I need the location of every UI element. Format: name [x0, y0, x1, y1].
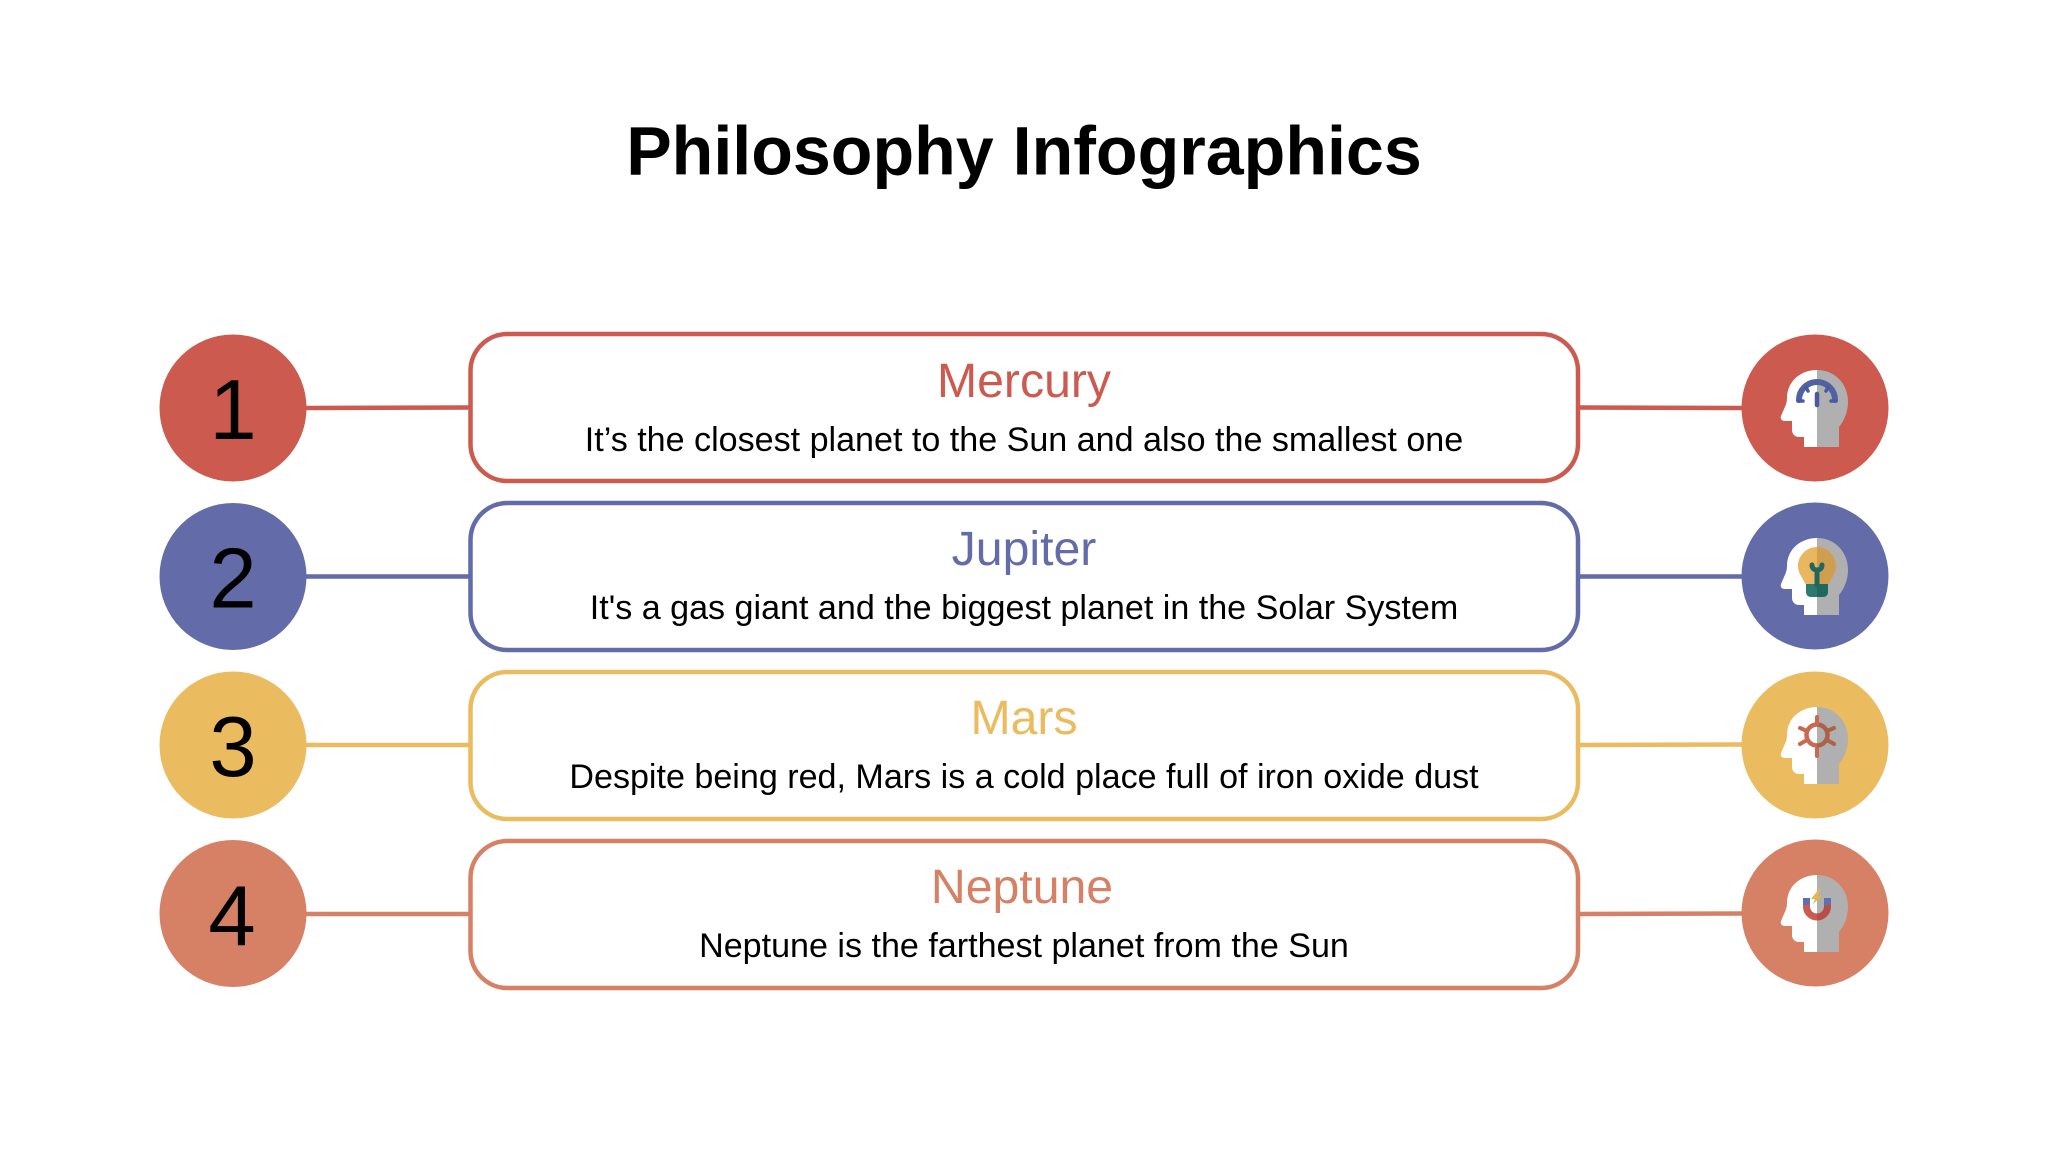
heading: Mercury: Mercury: [937, 354, 1111, 408]
icon: head with gauge: [1742, 334, 1888, 482]
number badge 1: 1: [209, 363, 257, 458]
number badge 3: [160, 672, 306, 818]
row 3: Mars: [160, 672, 1888, 819]
connector: number to box: [305, 743, 470, 747]
panel: Mars: [470, 672, 1578, 819]
connector: box to icon: [1578, 405, 1745, 410]
number badge 4: [160, 840, 306, 987]
heading: Mars: Mars: [970, 691, 1078, 745]
connector: box to icon: [1578, 742, 1745, 747]
number badge 3: 3: [209, 700, 257, 795]
icon: head with light bulb: [1742, 502, 1888, 650]
panel: Mercury: [470, 334, 1578, 481]
number badge 2: [160, 503, 306, 650]
connector: box to icon: [1578, 911, 1745, 916]
row 4: Neptune: [160, 840, 1888, 988]
description: Jupiter: It's a gas giant and the biggest planet in the Solar System: [590, 589, 1458, 627]
connector: box to icon: [1578, 574, 1745, 579]
description: Mars: Despite being red, Mars is a cold place full of iron oxide dust: [569, 758, 1479, 796]
icon: head with gear: [1742, 672, 1888, 818]
title: Philosophy Infographics: [626, 114, 1422, 190]
connector: number to box: [305, 912, 470, 916]
description: Mercury: It’s the closest planet to the Sun and also the smallest one: [585, 421, 1463, 459]
number badge 2: 2: [209, 532, 257, 626]
row 2: Jupiter: [160, 502, 1888, 650]
panel: Jupiter: [470, 503, 1578, 650]
row 1: Mercury: [160, 334, 1888, 482]
heading: Neptune: Neptune: [931, 860, 1113, 914]
panel: Neptune: [470, 841, 1578, 988]
connector: number to box: [305, 574, 470, 579]
number badge 1: [160, 334, 306, 482]
description: Neptune: Neptune is the farthest planet from the Sun: [699, 927, 1349, 965]
connector: number to box: [305, 405, 470, 410]
number badge 4: 4: [208, 870, 256, 964]
icon: head with magnet: [1742, 840, 1888, 986]
heading: Jupiter: Jupiter: [952, 522, 1096, 576]
